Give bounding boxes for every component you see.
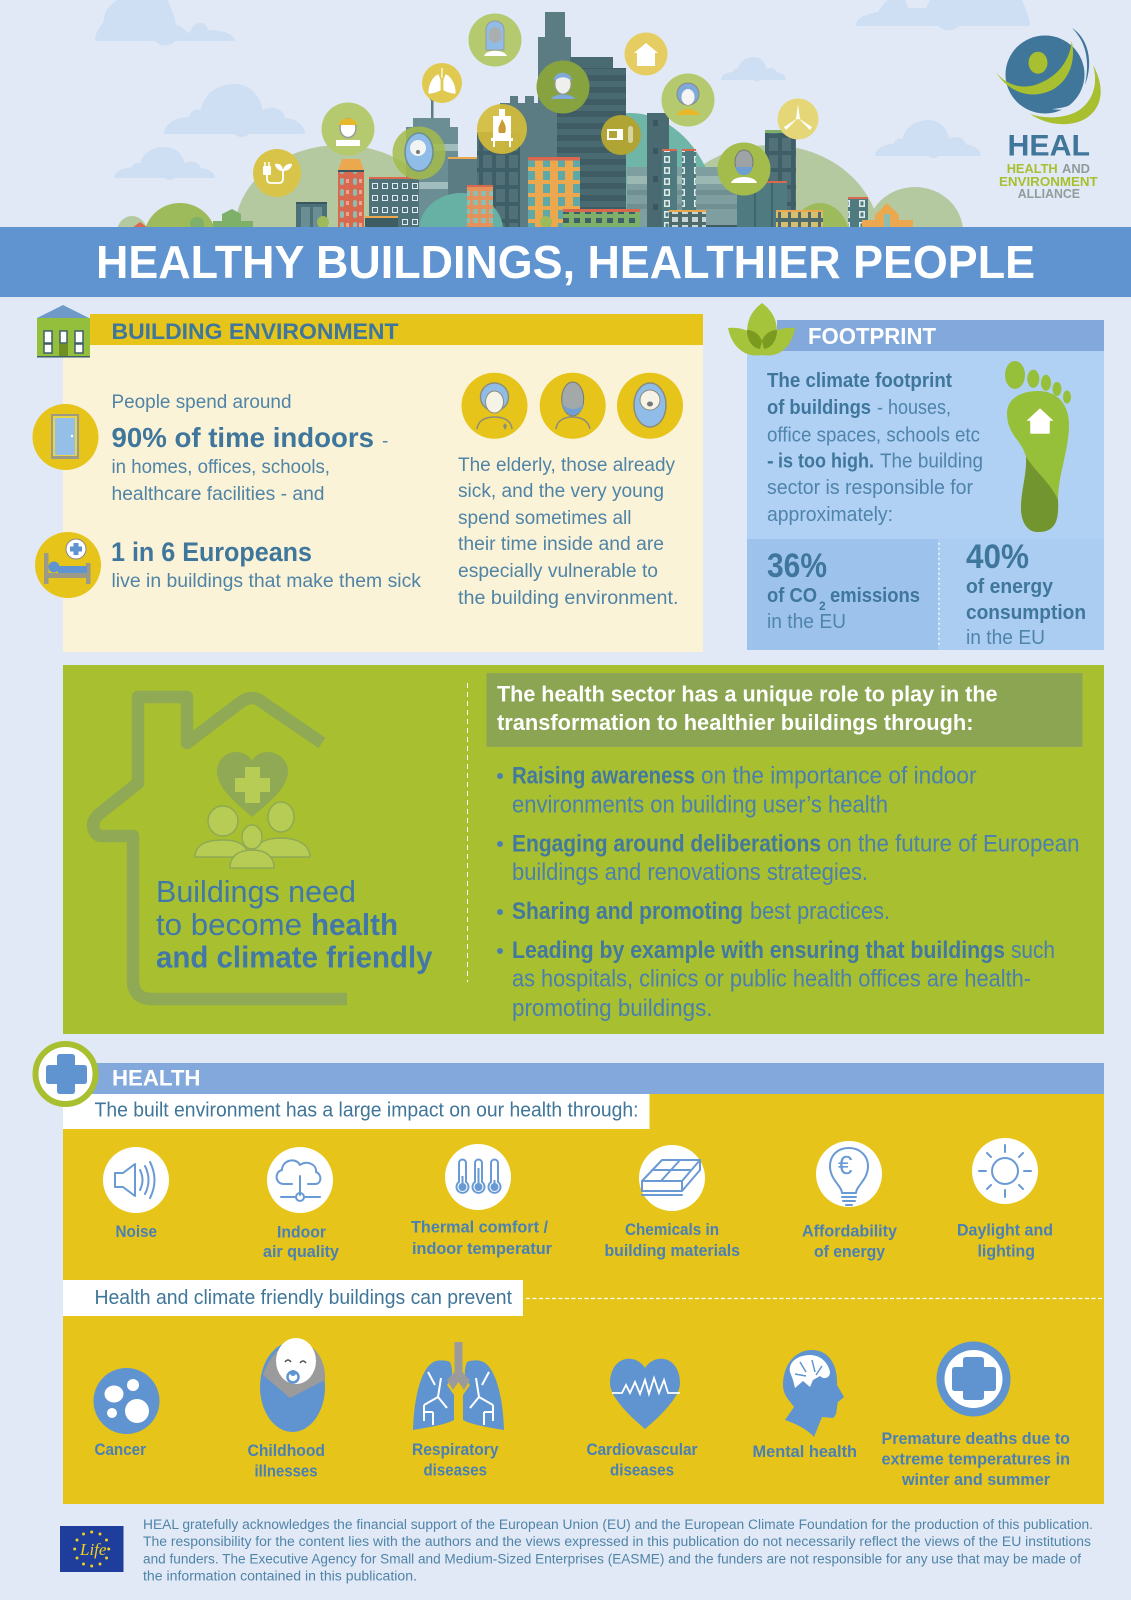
stat: 40 percent: consumption xyxy=(966,602,1086,624)
icon: health cross badge xyxy=(36,1044,96,1104)
bullet: engaging xyxy=(497,830,1080,886)
bullet: engaging: on the future of European xyxy=(827,830,1080,858)
text: vulnerable groups: especially vulnerable to xyxy=(458,561,658,582)
text: buildings need to become: and climate friendly xyxy=(156,940,433,974)
icon: baby xyxy=(617,373,683,439)
bullet: leading: promoting buildings. xyxy=(512,995,712,1022)
plug xyxy=(263,162,292,183)
item: daylight: lighting xyxy=(978,1242,1035,1260)
footer acknowledgement: HEAL gratefully acknowledges the financial support of the European Union (EU) and the European Climate Foundation for the production of this publication. xyxy=(143,1517,1093,1532)
item: thermal comfort xyxy=(411,1144,552,1258)
panel: footprint xyxy=(728,303,1104,650)
heading box xyxy=(486,673,1082,747)
item: mental health xyxy=(752,1350,857,1461)
bullet: sharing: Sharing and promoting xyxy=(512,898,743,925)
icon: building xyxy=(37,305,90,358)
footer acknowledgement: The responsibility for the content lies with the authors and the views expressed in this publication do not necessarily reflect the views of the EU institutions xyxy=(143,1534,1091,1549)
header illustration: city skyline xyxy=(95,0,1030,351)
label: built environment impact xyxy=(63,1094,650,1129)
stat: 36 percent xyxy=(767,547,920,633)
stat: 36 percent: in the EU xyxy=(767,611,846,633)
logo wordmark: HEAL xyxy=(1008,130,1090,163)
label: can prevent xyxy=(63,1280,1104,1316)
bullet: leading: as hospitals, clinics or public health offices are health- xyxy=(512,966,1031,992)
item: affordability: Affordability xyxy=(802,1222,898,1240)
icon: footprint xyxy=(1005,361,1071,532)
worker xyxy=(336,118,360,146)
item: childhood illnesses xyxy=(248,1338,325,1480)
item: daylight: Daylight and xyxy=(957,1220,1053,1240)
item: premature deaths: extreme temperatures in xyxy=(882,1450,1070,1468)
text: 1 in 6 Europeans: 1 in 6 Europeans xyxy=(111,537,312,567)
bullet: raising awareness: Raising awareness xyxy=(512,762,695,789)
item: mental health: Mental health xyxy=(752,1442,857,1461)
home xyxy=(634,43,658,66)
baby xyxy=(405,133,433,171)
logo: HEAL xyxy=(996,28,1101,201)
footer acknowledgement: and funders. The Executive Agency for Small and Medium-Sized Enterprises (EASME) and the funders are not responsible for any use that may be made of xyxy=(143,1551,1081,1566)
stat: 40 percent: of energy xyxy=(966,576,1054,598)
man xyxy=(551,73,575,99)
old man xyxy=(731,150,757,183)
bullet: leading: Leading by example with ensuring that buildings xyxy=(512,937,1005,964)
text: 1 in 6 Europeans: live in buildings that make them sick xyxy=(112,571,421,592)
logo: HEAL: HEALTH xyxy=(1007,161,1058,176)
text: 90 percent indoors: People spend around xyxy=(112,392,292,413)
text: buildings need to become: Buildings need xyxy=(156,874,356,909)
item: premature deaths: Premature deaths due to xyxy=(882,1429,1070,1448)
item: affordability: € xyxy=(838,1150,853,1180)
text: vulnerable groups: spend sometimes all xyxy=(458,508,632,529)
stat: 40 percent: 40% xyxy=(966,538,1029,576)
hills xyxy=(118,113,963,227)
text: climate footprint: sector is responsible for xyxy=(767,477,973,499)
elderly woman xyxy=(677,83,700,115)
panel: health xyxy=(36,1044,1104,1504)
stat: 36 percent: 36% xyxy=(767,547,827,585)
clouds xyxy=(95,0,1030,180)
text: climate footprint xyxy=(767,370,983,526)
text: climate footprint: The building xyxy=(880,450,983,472)
item: chemicals: Chemicals in xyxy=(625,1220,719,1239)
front buildings xyxy=(132,149,913,231)
lungs small xyxy=(429,68,455,93)
text: climate footprint: is too high. xyxy=(778,450,874,472)
icon: sick bed xyxy=(35,532,101,598)
woman xyxy=(484,21,507,56)
text: buildings need to become xyxy=(156,874,433,974)
icon: door xyxy=(32,404,98,470)
text: climate footprint: - houses, xyxy=(877,397,951,419)
text: 90 percent indoors: in homes, offices, schools, xyxy=(112,457,330,478)
stat: 36 percent: emissions xyxy=(830,585,920,607)
microwave xyxy=(607,126,633,143)
footer acknowledgement: the information contained in this publication. xyxy=(143,1569,417,1584)
text: climate footprint: approximately: xyxy=(767,504,893,526)
text: buildings need to become: health xyxy=(311,907,398,942)
item: respiratory: Respiratory xyxy=(412,1440,499,1459)
heading: BUILDING ENVIRONMENT xyxy=(112,319,399,344)
icon: heart with family xyxy=(195,752,310,868)
text: 90 percent indoors xyxy=(112,392,388,505)
item: chemicals xyxy=(604,1145,740,1260)
item: premature deaths: winter and summer xyxy=(901,1470,1050,1489)
text: 90 percent indoors: healthcare facilities - and xyxy=(112,484,324,505)
text: vulnerable groups xyxy=(458,455,678,609)
heading: FOOTPRINT xyxy=(808,323,936,349)
back buildings xyxy=(406,12,796,228)
teal front hill xyxy=(419,193,503,227)
bullet: engaging: buildings and renovations strategies. xyxy=(512,859,868,886)
panel: health sector role xyxy=(63,665,1104,1034)
item: indoor air quality xyxy=(263,1147,340,1261)
item: childhood illnesses: illnesses xyxy=(254,1462,318,1480)
item: daylight xyxy=(957,1138,1053,1260)
bullet: leading: such xyxy=(1011,937,1055,964)
footer acknowledgement xyxy=(143,1517,1093,1584)
heading box: The health sector has a unique role to play in the xyxy=(497,682,998,706)
bullet: raising awareness xyxy=(497,762,977,818)
bullet: sharing xyxy=(497,898,890,925)
item: premature deaths xyxy=(882,1342,1070,1489)
stat: 40 percent xyxy=(966,538,1086,649)
stove xyxy=(491,109,513,147)
logo: HEAL: ALLIANCE xyxy=(1018,186,1080,201)
bullet: leading xyxy=(497,937,1055,1022)
item: cancer: Cancer xyxy=(94,1440,146,1459)
icon: house outline xyxy=(93,697,347,999)
item: noise xyxy=(103,1147,169,1241)
item: cardiovascular: diseases xyxy=(610,1460,674,1480)
dashed divider xyxy=(466,683,468,982)
circle icons xyxy=(253,14,818,197)
item: indoor air quality: air quality xyxy=(263,1242,340,1261)
heading box: transformation to healthier buildings through: xyxy=(497,710,974,735)
text: vulnerable groups: the building environment. xyxy=(458,588,678,609)
icon: leaves xyxy=(728,303,795,356)
panel: building environment xyxy=(32,305,703,652)
item: thermal comfort: Thermal comfort / xyxy=(411,1218,548,1236)
text: 90 percent indoors: 90% of time indoors xyxy=(112,422,374,453)
text: climate footprint: office spaces, schools etc xyxy=(767,424,980,446)
text: climate footprint: of buildings xyxy=(767,397,871,419)
icon: EU LIFE flag: Life xyxy=(79,1540,107,1559)
logo: HEAL: ENVIRONMENT xyxy=(999,174,1098,189)
item: indoor air quality: Indoor xyxy=(277,1222,326,1242)
text: 1 in 6 Europeans xyxy=(111,537,421,592)
item: cancer xyxy=(94,1368,160,1459)
text: climate footprint: The climate footprint xyxy=(767,370,952,392)
turbine xyxy=(784,104,812,130)
icon: EU LIFE flag xyxy=(60,1526,124,1572)
item: childhood illnesses: Childhood xyxy=(248,1441,325,1460)
icon: elderly woman xyxy=(462,373,528,439)
item: noise: Noise xyxy=(116,1222,157,1241)
text: vulnerable groups: The elderly, those already xyxy=(458,455,675,476)
text: climate footprint: - xyxy=(767,450,774,472)
title banner xyxy=(0,227,1131,297)
stat: 36 percent: 2 xyxy=(819,599,826,613)
bullet: sharing: best practices. xyxy=(750,898,890,925)
item: cardiovascular: Cardiovascular xyxy=(586,1440,698,1459)
icon: elderly man xyxy=(540,373,606,439)
bullet: engaging: Engaging around deliberations xyxy=(512,830,821,858)
stat: 40 percent: in the EU xyxy=(966,627,1045,649)
heading: HEALTH xyxy=(112,1066,200,1090)
text: vulnerable groups: their time inside and are xyxy=(458,534,664,555)
text: 90 percent indoors: - xyxy=(382,431,388,452)
bullet: raising awareness: environments on building user’s health xyxy=(512,792,888,818)
bullet: raising awareness: on the importance of indoor xyxy=(701,762,977,789)
text: vulnerable groups: sick, and the very young xyxy=(458,481,664,502)
logo: HEAL: AND xyxy=(1062,161,1090,176)
item: affordability: of energy xyxy=(814,1242,885,1261)
item: cardiovascular xyxy=(586,1359,698,1480)
item: chemicals: building materials xyxy=(604,1241,740,1260)
stat: 36 percent: of CO xyxy=(767,585,817,607)
text: buildings need to become: to become xyxy=(156,907,302,942)
title banner: HEALTHY BUILDINGS, HEALTHIER PEOPLE xyxy=(96,236,1035,288)
label: built environment impact: The built environment has a large impact on our health through: xyxy=(94,1100,638,1122)
item: respiratory: diseases xyxy=(424,1460,487,1480)
item: thermal comfort: indoor temperatur xyxy=(412,1239,552,1258)
item: respiratory xyxy=(412,1342,504,1480)
label: can prevent: Health and climate friendly buildings can prevent xyxy=(94,1287,512,1309)
item: affordability xyxy=(802,1141,898,1261)
